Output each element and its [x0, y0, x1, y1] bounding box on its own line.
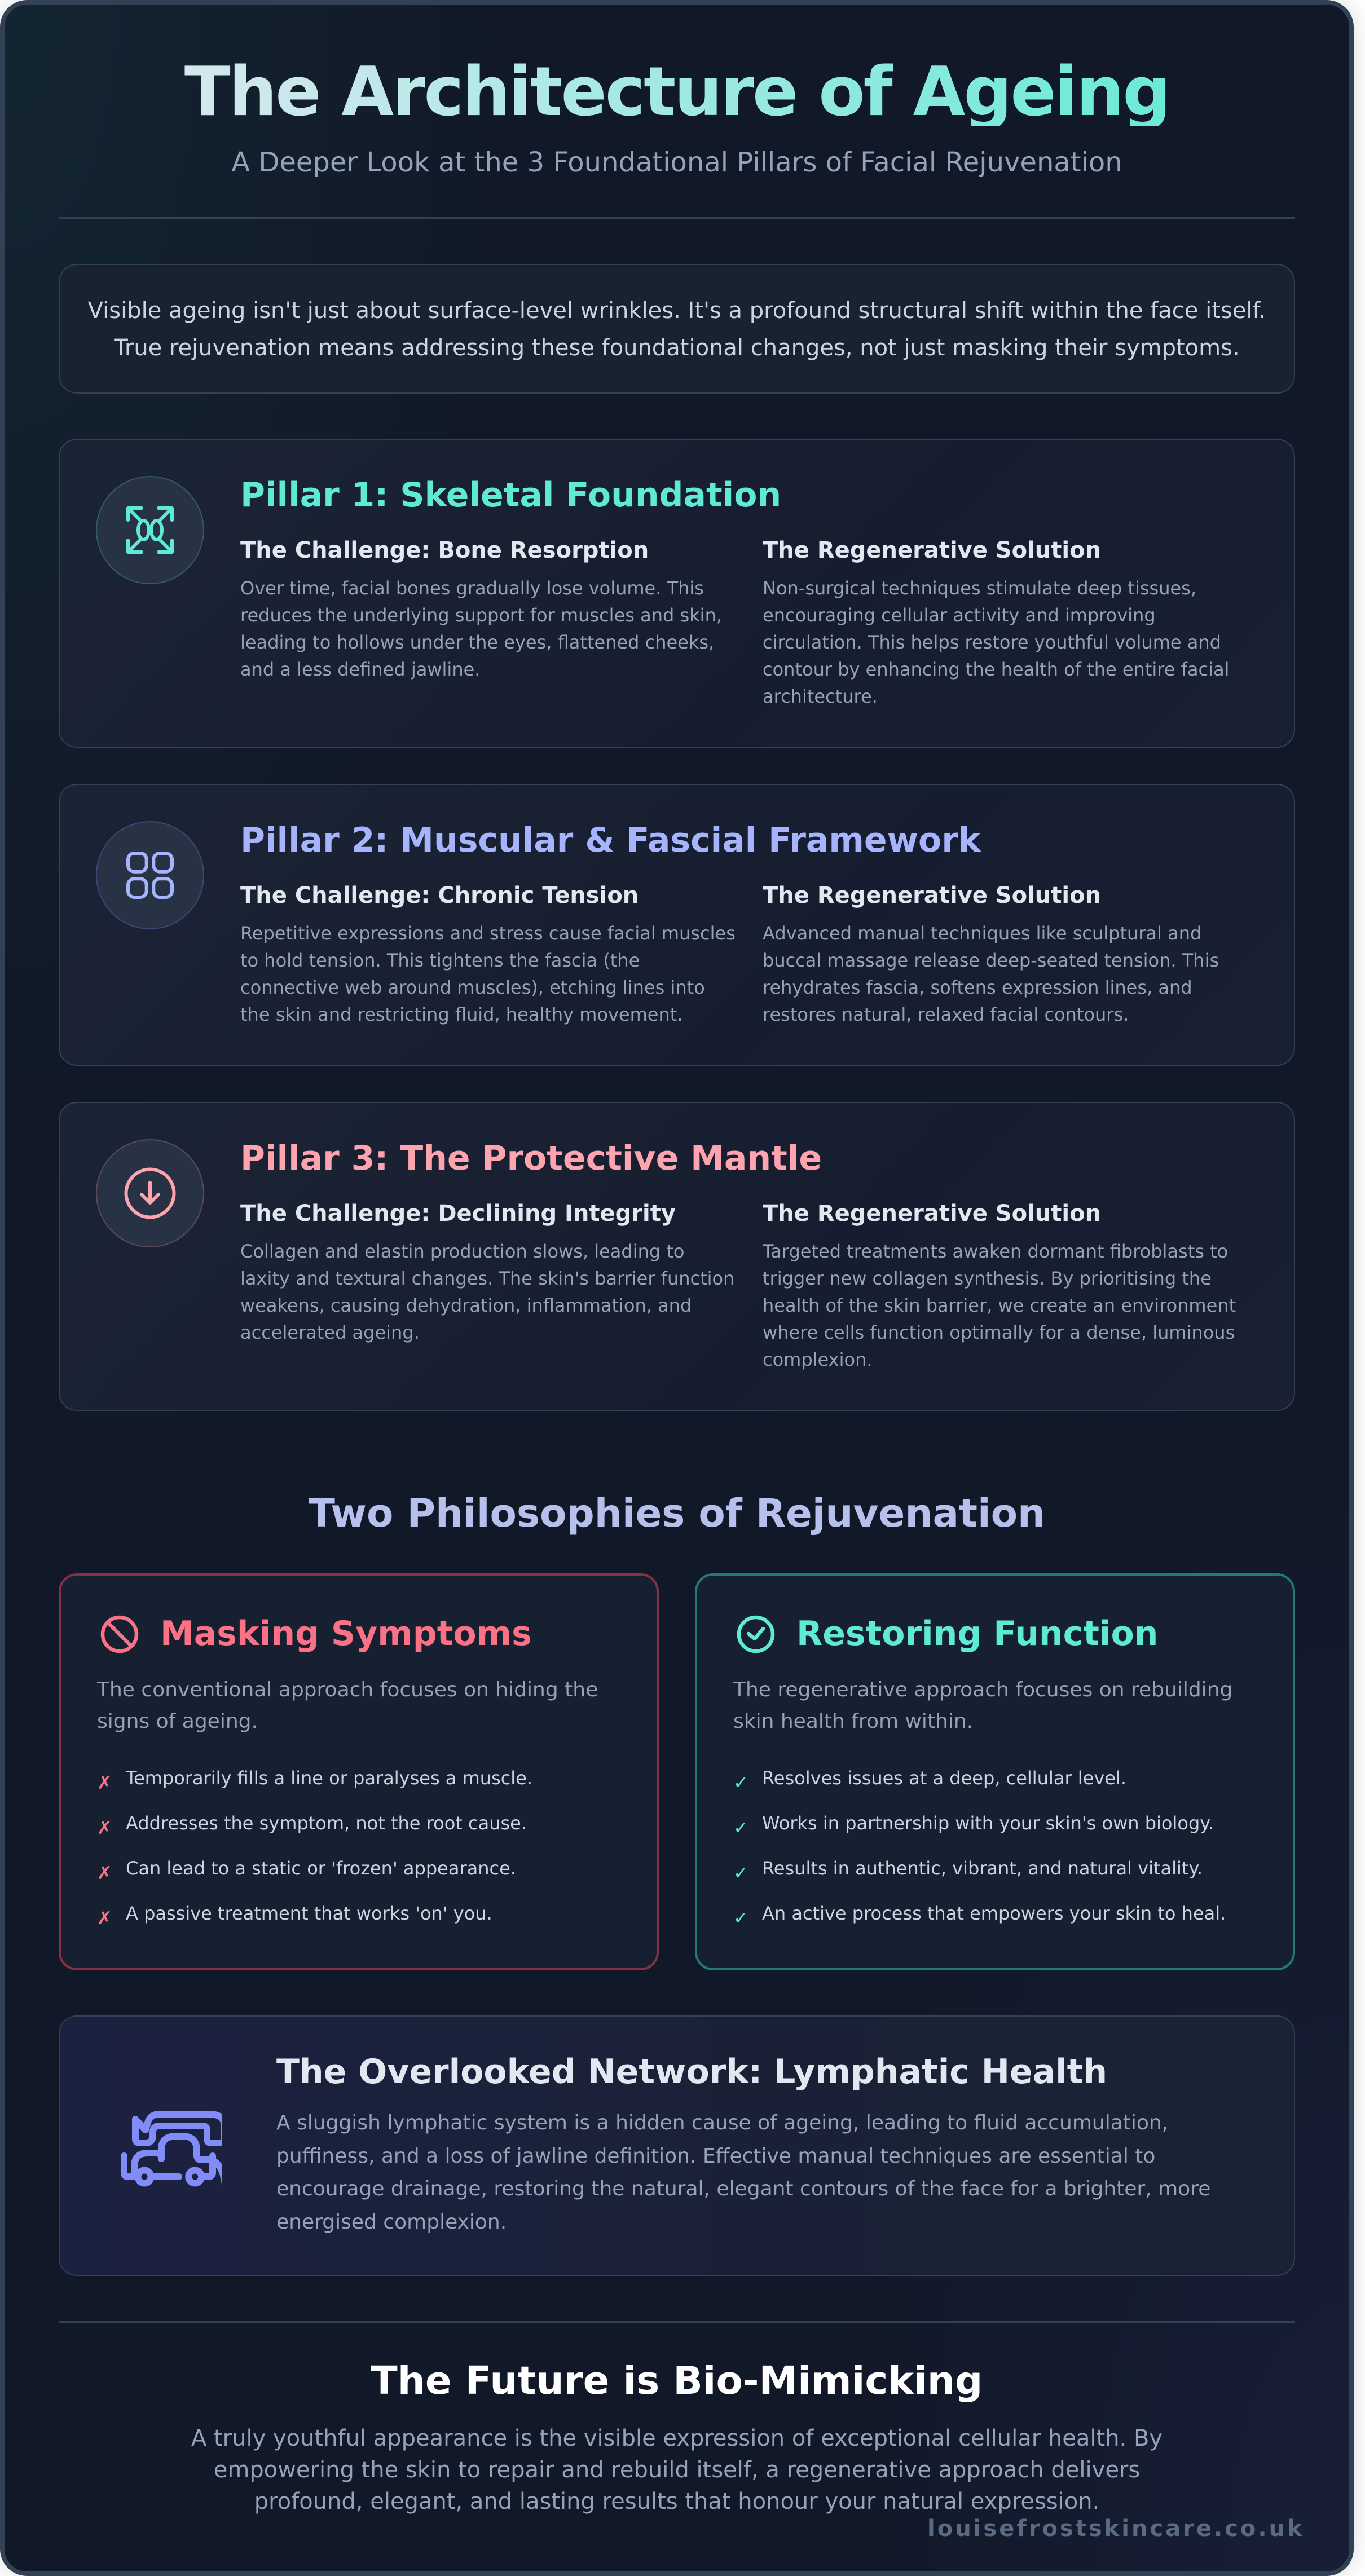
intro text: Visible ageing isn't just about surface-level wrinkles. It's a profound structural shift within the face itself.: [88, 298, 1266, 324]
challenge heading: The Challenge: Bone Resorption: [240, 537, 649, 563]
panel: pillar 2: [59, 784, 1295, 1066]
solution text: Non-surgical techniques stimulate deep tissues,: [763, 577, 1196, 599]
panel: restoring function: An active process that empowers your skin to heal.: [762, 1903, 1226, 1924]
challenge text: the skin and restricting fluid, healthy movement.: [240, 1004, 682, 1025]
description: [97, 1678, 598, 1733]
challenge text: [240, 923, 736, 1025]
challenge text: to hold tension. This tightens the fascia (the: [240, 950, 640, 971]
list item: [97, 1903, 492, 1929]
panel: masking symptoms: ✗: [97, 1817, 112, 1838]
challenge text: Over time, facial bones gradually lose volume. This: [240, 577, 704, 599]
heading: lymphatic health: The Overlooked Network: Lymphatic Health: [276, 2052, 1107, 2092]
list item: [733, 1810, 734, 1841]
solution text: complexion.: [763, 1349, 873, 1370]
panel: restoring function: Works in partnership with your skin's own biology.: [762, 1812, 1214, 1834]
solution text: contour by enhancing the health of the entire facial: [763, 659, 1229, 680]
solution text: architecture.: [763, 686, 878, 707]
panel: restoring function: ✓: [733, 1907, 748, 1929]
description: skin health from within.: [733, 1710, 973, 1733]
heading: pillar 2: Pillar 2: Muscular & Fascial Framework: [240, 821, 981, 860]
lymphatic text: energised complexion.: [276, 2211, 507, 2233]
icon: skeletal foundation: [96, 476, 204, 584]
closing text: empowering the skin to repair and rebuild itself, a regenerative approach delivers: [214, 2457, 1140, 2483]
list item: [733, 1855, 734, 1886]
description: signs of ageing.: [97, 1710, 258, 1733]
lymphatic text: encourage drainage, restoring the natural, elegant contours of the face for a brighter, more: [276, 2177, 1210, 2200]
closing text: [59, 2423, 1295, 2517]
list item: [733, 1765, 734, 1796]
description: The conventional approach focuses on hiding the: [97, 1678, 598, 1701]
heading: masking symptoms: Masking Symptoms: [160, 1614, 532, 1653]
solution heading: The Regenerative Solution: [763, 537, 1101, 563]
panel: masking symptoms: A passive treatment that works 'on' you.: [126, 1903, 492, 1924]
intro text: [88, 298, 1266, 361]
challenge text: leading to hollows under the eyes, flattened cheeks,: [240, 632, 714, 653]
panel: restoring function: [695, 1573, 1295, 1970]
challenge heading: The Challenge: Declining Integrity: [240, 1201, 676, 1227]
panel: masking symptoms: ✗: [97, 1772, 112, 1793]
intro text: True rejuvenation means addressing these foundational changes, not just masking their symptoms.: [114, 335, 1240, 361]
icon: protective mantle: [96, 1139, 204, 1247]
panel: masking symptoms: ✗: [97, 1862, 112, 1884]
solution text: restores natural, relaxed facial contours.: [763, 1004, 1129, 1025]
icon: muscular framework: [96, 821, 204, 929]
list item: [97, 1767, 532, 1793]
solution text: encouraging cellular activity and improving: [763, 605, 1156, 626]
panel: introduction: [59, 264, 1295, 394]
solution text: where cells function optimally for a dense, luminous: [763, 1322, 1235, 1343]
solution text: buccal massage release deep-seated tension. This: [763, 950, 1219, 971]
list item: [733, 1900, 734, 1931]
heading: two philosophies: Two Philosophies of Rejuvenation: [309, 1491, 1045, 1536]
panel: masking symptoms: [59, 1573, 659, 1970]
challenge text: Repetitive expressions and stress cause facial muscles: [240, 923, 736, 944]
description: The regenerative approach focuses on rebuilding: [733, 1678, 1232, 1701]
solution text: rehydrates fascia, softens expression lines, and: [763, 977, 1192, 998]
icon: check circle: [737, 1615, 775, 1653]
panel: masking symptoms: Addresses the symptom, not the root cause.: [126, 1812, 527, 1834]
lymphatic text: [276, 2107, 1210, 2239]
closing text: profound, elegant, and lasting results that honour your natural expression.: [254, 2489, 1099, 2515]
challenge text: Collagen and elastin production slows, leading to: [240, 1241, 685, 1262]
heading: pillar 3: Pillar 3: The Protective Mantle: [240, 1139, 822, 1178]
panel: lymphatic health: [59, 2015, 1295, 2276]
panel: masking symptoms: ✗: [97, 1907, 112, 1929]
description: [733, 1678, 1232, 1733]
challenge text: laxity and textural changes. The skin's barrier function: [240, 1268, 734, 1289]
lymphatic text: A sluggish lymphatic system is a hidden cause of ageing, leading to fluid accumulation,: [276, 2111, 1168, 2134]
icon: lymphatic network: [114, 2092, 222, 2200]
panel: restoring function: Results in authentic, vibrant, and natural vitality.: [762, 1858, 1203, 1879]
challenge text: connective web around muscles), etching lines into: [240, 977, 705, 998]
challenge text: accelerated ageing.: [240, 1322, 420, 1343]
panel: pillar 1: [59, 439, 1295, 748]
title: The Architecture of Ageing: [184, 53, 1169, 131]
website watermark: louisefrostskincare.co.uk: [927, 2516, 1305, 2542]
challenge text: reduces the underlying support for muscles and skin,: [240, 605, 722, 626]
closing text: A truly youthful appearance is the visible expression of exceptional cellular health. By: [191, 2425, 1163, 2451]
solution heading: The Regenerative Solution: [763, 1201, 1101, 1227]
panel: restoring function: ✓: [733, 1772, 748, 1793]
heading: the future: The Future is Bio-Mimicking: [371, 2358, 983, 2403]
panel: restoring function: ✓: [733, 1862, 748, 1884]
challenge text: [240, 1241, 734, 1343]
heading: pillar 1: Pillar 1: Skeletal Foundation: [240, 475, 781, 515]
solution text: [763, 923, 1219, 1025]
heading: restoring function: Restoring Function: [796, 1614, 1158, 1653]
subtitle: A Deeper Look at the 3 Foundational Pillars of Facial Rejuvenation: [231, 147, 1122, 178]
solution text: circulation. This helps restore youthful volume and: [763, 632, 1221, 653]
icon: ban: [100, 1615, 139, 1653]
panel: masking symptoms: Temporarily fills a line or paralyses a muscle.: [126, 1767, 532, 1789]
solution text: [763, 1241, 1236, 1370]
solution heading: The Regenerative Solution: [763, 883, 1101, 908]
challenge heading: The Challenge: Chronic Tension: [240, 883, 639, 908]
list item: [97, 1812, 527, 1838]
challenge text: and a less defined jawline.: [240, 659, 480, 680]
lymphatic text: puffiness, and a loss of jawline definition. Effective manual techniques are essential to: [276, 2144, 1155, 2168]
challenge text: weakens, causing dehydration, inflammation, and: [240, 1295, 692, 1316]
solution text: [763, 577, 1229, 707]
challenge text: [240, 577, 722, 680]
solution text: health of the skin barrier, we create an environment: [763, 1295, 1236, 1316]
panel: restoring function: ✓: [733, 1817, 748, 1838]
panel: restoring function: Resolves issues at a deep, cellular level.: [762, 1767, 1126, 1789]
solution text: Targeted treatments awaken dormant fibroblasts to: [763, 1241, 1228, 1262]
solution text: trigger new collagen synthesis. By prioritising the: [763, 1268, 1212, 1289]
list item: [97, 1858, 516, 1884]
panel: pillar 3: [59, 1102, 1295, 1411]
solution text: Advanced manual techniques like sculptural and: [763, 923, 1201, 944]
panel: masking symptoms: Can lead to a static or 'frozen' appearance.: [126, 1858, 516, 1879]
